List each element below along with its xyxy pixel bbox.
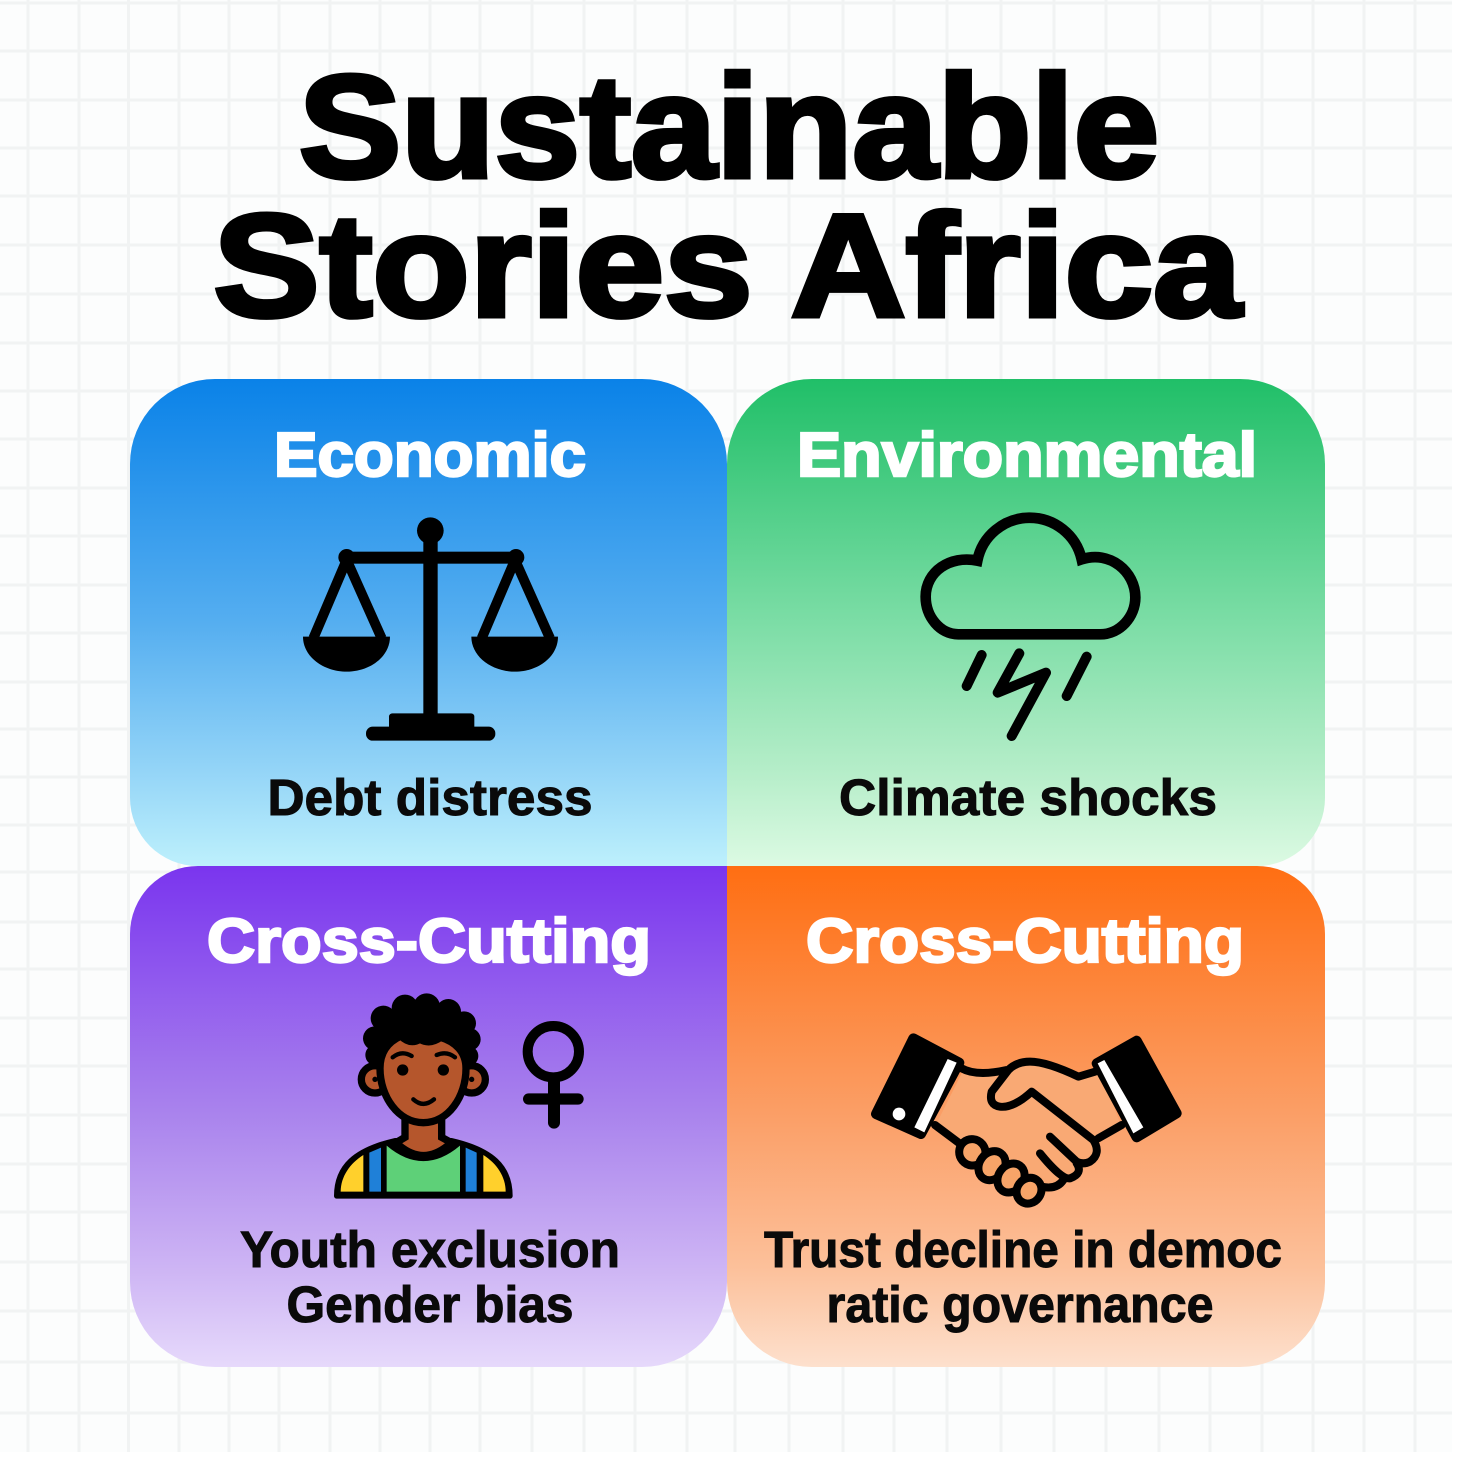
- icon: storm cloud: [926, 518, 1135, 736]
- title: Sustainable: [299, 45, 1159, 208]
- heading: cross-cutting left: Cross-Cutting: [207, 907, 651, 976]
- title: [214, 45, 1243, 347]
- label: climate shocks: Climate shocks: [839, 769, 1217, 826]
- label: trust decline in democratic governance: [764, 1221, 1282, 1333]
- heading: economic: Economic: [274, 421, 586, 490]
- heading: cross-cutting right: Cross-Cutting: [806, 907, 1244, 976]
- panel: environmental: [727, 379, 1325, 866]
- panel: trust: [727, 866, 1325, 1367]
- panel: youth and gender: [130, 866, 727, 1367]
- label: youth exclusion and gender bias: [240, 1221, 620, 1333]
- label: youth exclusion and gender bias: Gender bias: [286, 1276, 574, 1333]
- panel: economic: [130, 379, 727, 866]
- heading: environmental: Environmental: [797, 421, 1257, 490]
- icon: venus symbol: [528, 1026, 579, 1123]
- label: trust decline in democratic governance: ratic governance: [826, 1276, 1214, 1333]
- icon: young person: [337, 993, 510, 1196]
- label: trust decline in democratic governance: Trust decline in democ: [764, 1221, 1282, 1278]
- title: Stories Africa: [214, 184, 1243, 347]
- label: debt distress: Debt distress: [268, 769, 592, 826]
- icon: balance scale: [303, 517, 558, 741]
- icon: handshake: [876, 1038, 1177, 1208]
- label: youth exclusion and gender bias: Youth exclusion: [240, 1221, 620, 1278]
